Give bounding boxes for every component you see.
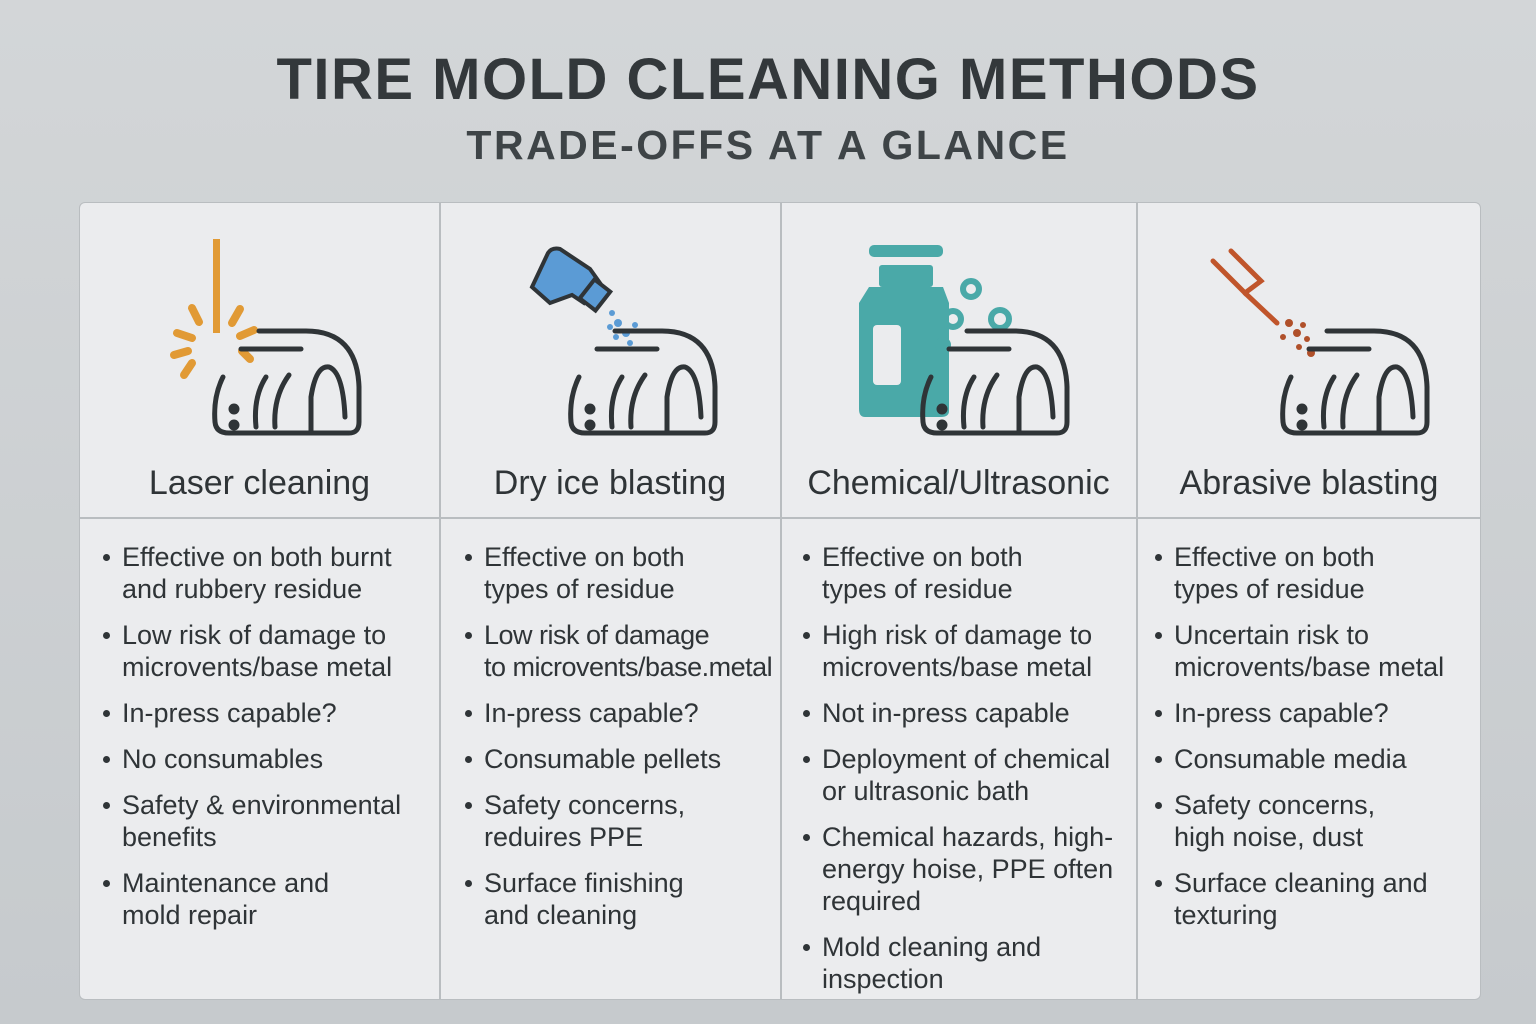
bullets: Deployment of chemical: [822, 744, 1110, 774]
bullets: Maintenance and: [122, 868, 329, 898]
bullets: reduires PPE: [484, 822, 643, 852]
bullets: [1155, 542, 1444, 930]
heading: Chemical/Ultrasonic: [807, 464, 1110, 502]
icon: laser: [170, 239, 362, 436]
bullets: Low risk of damage to: [122, 620, 386, 650]
bullets: In-press capable?: [484, 698, 699, 728]
bullets: Low risk of damage: [484, 620, 709, 650]
bullets: High risk of damage to: [822, 620, 1092, 650]
bullets: or ultrasonic bath: [822, 776, 1029, 806]
bullets: Safety & environmental: [122, 790, 401, 820]
bullets: Uncertain risk to: [1174, 620, 1369, 650]
bullets: and cleaning: [484, 900, 637, 930]
bullets: Mold cleaning and: [822, 932, 1041, 962]
bullets: types of residue: [822, 574, 1013, 604]
bullets: Consumable pellets: [484, 744, 721, 774]
bullets: types of residue: [484, 574, 675, 604]
bullets: to microvents/base.metal: [484, 652, 772, 682]
bullets: high noise, dust: [1174, 822, 1363, 852]
bullets: [103, 542, 401, 930]
title: TIRE MOLD CLEANING METHODS: [276, 47, 1260, 112]
bullets: Not in-press capable: [822, 698, 1070, 728]
bullets: mold repair: [122, 900, 257, 930]
bullets: Safety concerns,: [484, 790, 685, 820]
bullets: Effective on both: [822, 542, 1023, 572]
panel: chemical/ultrasonic: [803, 245, 1113, 994]
bullets: benefits: [122, 822, 217, 852]
heading: Dry ice blasting: [494, 464, 726, 502]
bullets: inspection: [822, 964, 944, 994]
heading: Abrasive blasting: [1180, 464, 1438, 502]
bullets: Effective on both: [484, 542, 685, 572]
panel: dry ice blasting: [465, 246, 772, 930]
bullets: [465, 542, 772, 930]
bullets: energy hoise, PPE often: [822, 854, 1113, 884]
bullets: No consumables: [122, 744, 323, 774]
icon: blaster: [1210, 248, 1430, 436]
bullets: In-press capable?: [1174, 698, 1389, 728]
bullets: microvents/base metal: [122, 652, 392, 682]
bullets: Surface finishing: [484, 868, 684, 898]
bullets: Surface cleaning and: [1174, 868, 1428, 898]
panel: laser cleaning: [103, 239, 401, 930]
bullets: microvents/base metal: [1174, 652, 1444, 682]
bullets: required: [822, 886, 921, 916]
bullets: [803, 542, 1113, 994]
bullets: In-press capable?: [122, 698, 337, 728]
bullets: types of residue: [1174, 574, 1365, 604]
heading: Laser cleaning: [149, 464, 370, 502]
panel: abrasive blasting: [1155, 248, 1444, 930]
table: [79, 202, 1481, 1000]
icon: nozzle: [530, 246, 718, 436]
icon: bottle: [859, 245, 1070, 436]
bullets: Safety concerns,: [1174, 790, 1375, 820]
bullets: microvents/base metal: [822, 652, 1092, 682]
bullets: Effective on both burnt: [122, 542, 392, 572]
bullets: Effective on both: [1174, 542, 1375, 572]
bullets: and rubbery residue: [122, 574, 362, 604]
bullets: Chemical hazards, high-: [822, 822, 1113, 852]
bullets: texturing: [1174, 900, 1278, 930]
bullets: Consumable media: [1174, 744, 1407, 774]
subtitle: TRADE-OFFS AT A GLANCE: [466, 122, 1070, 168]
